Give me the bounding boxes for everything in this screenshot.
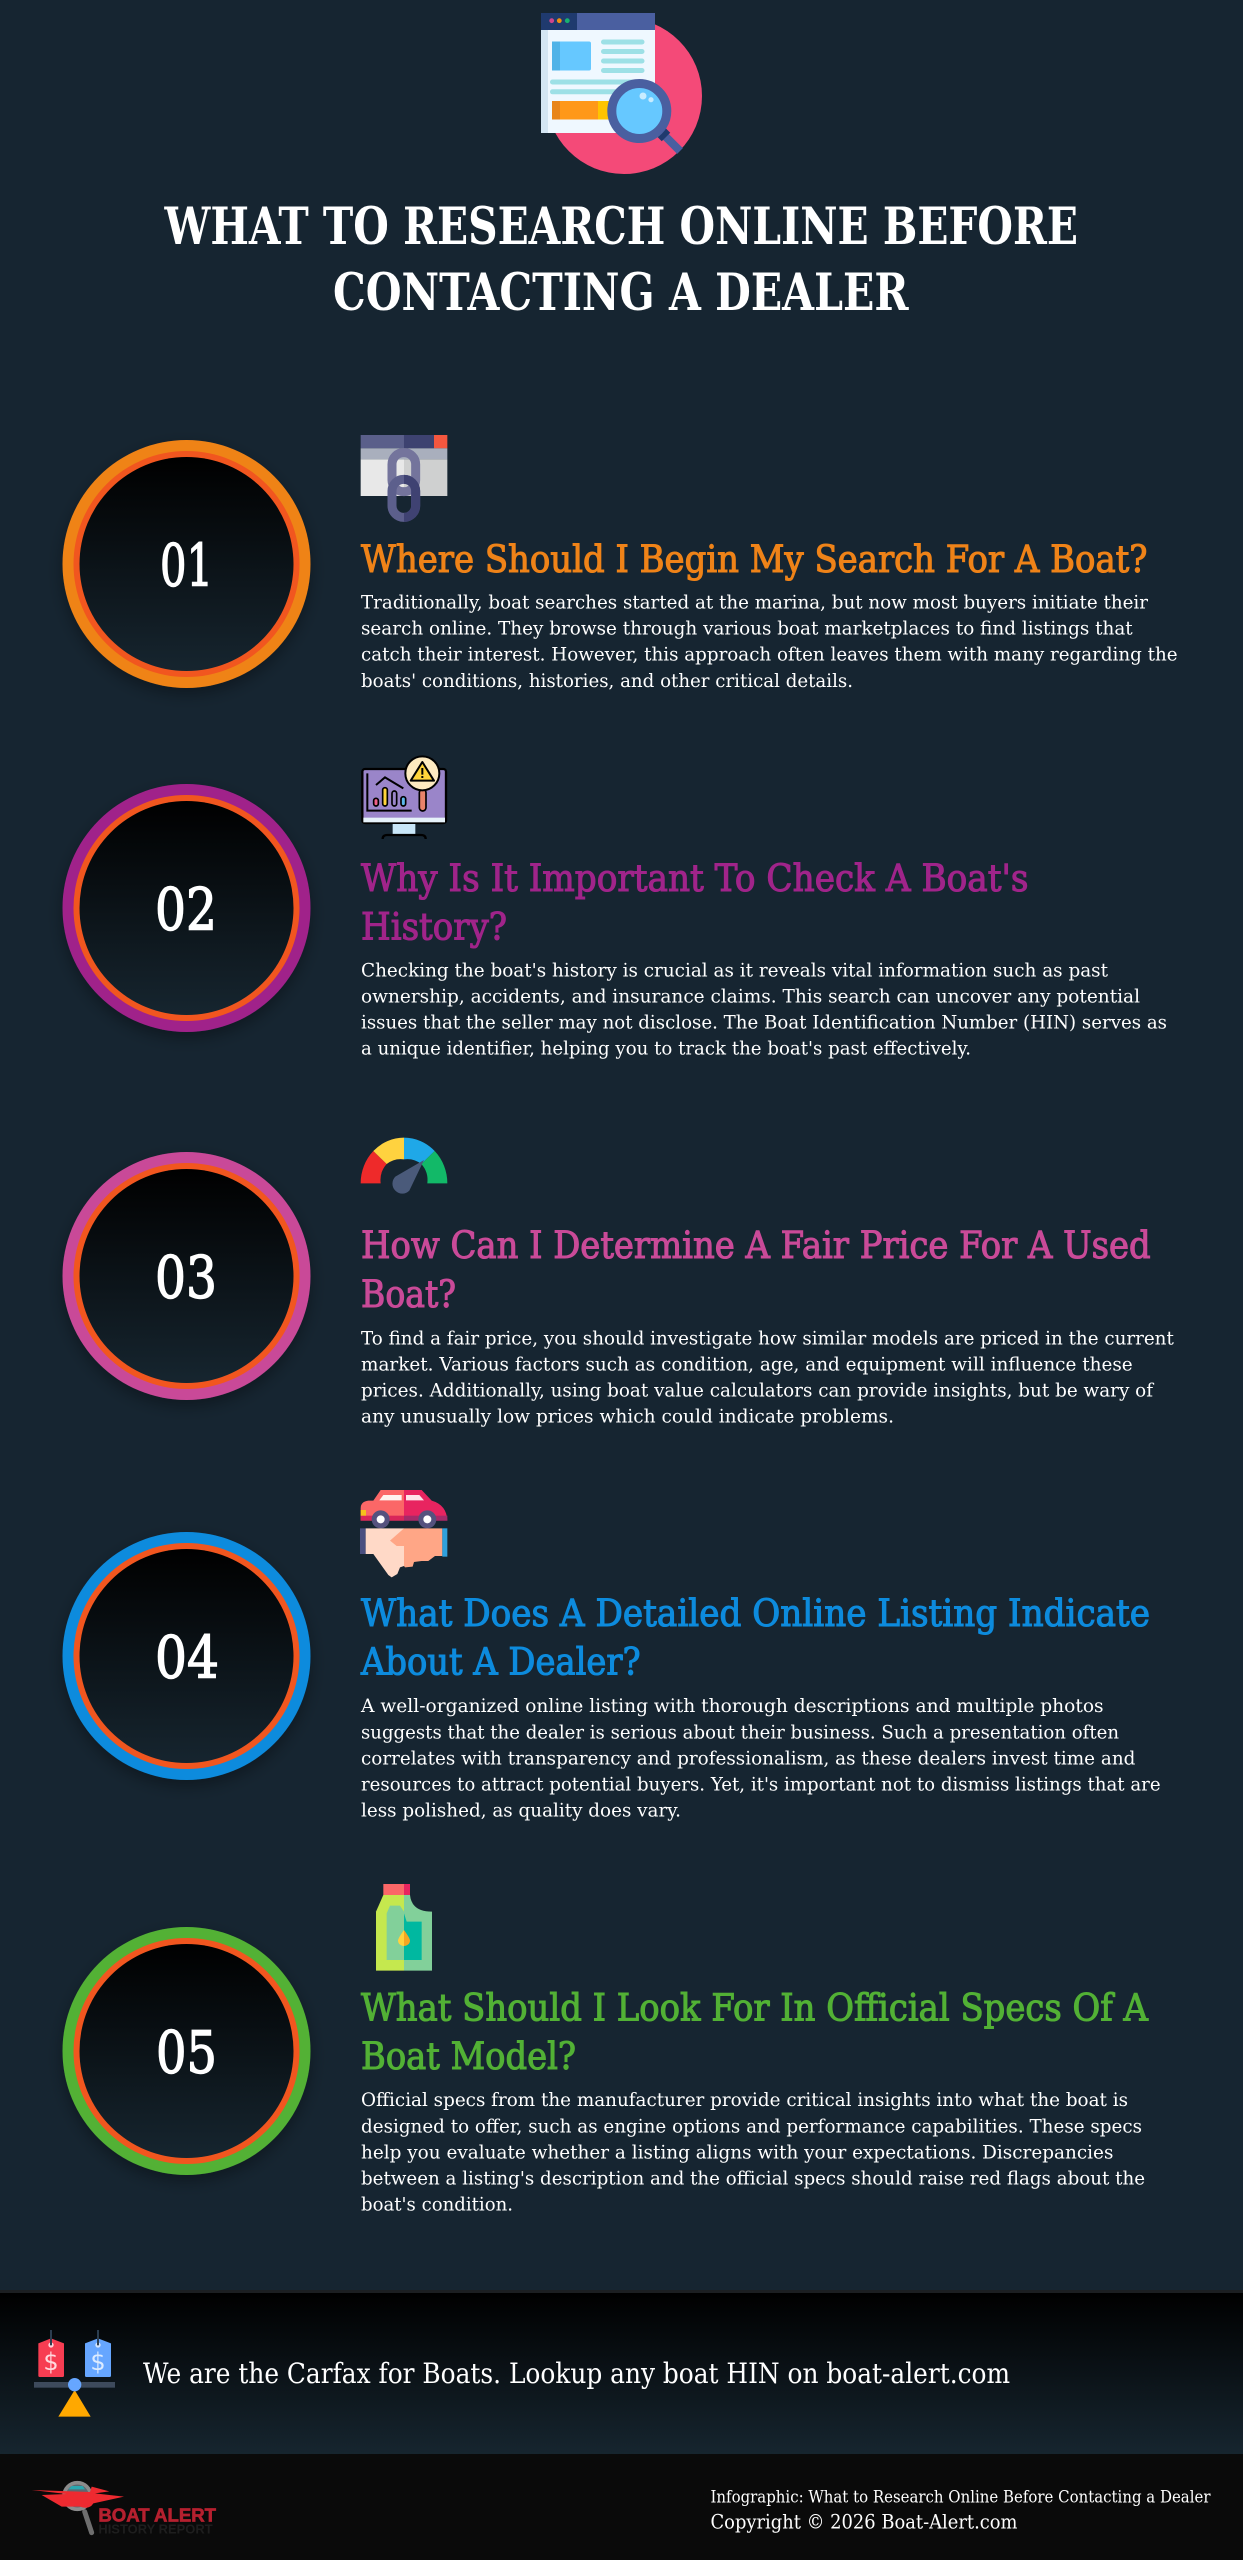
number badge 05: 05 — [156, 2018, 217, 2086]
body text: To find a fair price, you should investigate how similar models are priced in the current — [361, 1327, 1174, 1349]
body text: resources to attract potential buyers. Yet, it's important not to dismiss listings that are — [361, 1774, 1161, 1796]
logo: Boat Alert: BOAT ALERT — [98, 2505, 216, 2526]
body text: catch their interest. However, this approach often leaves them with many regarding the — [361, 644, 1178, 666]
body text: Official specs from the manufacturer provide critical insights into what the boat is — [361, 2089, 1128, 2111]
icon: price tags on balance scale: $ — [90, 2348, 106, 2376]
body text: any unusually low prices which could indicate problems. — [361, 1406, 894, 1428]
number badge 03: 03 — [155, 1244, 217, 1312]
heading — [361, 1987, 1149, 2078]
body text: search online. They browse through various boat marketplaces to find listings that — [361, 618, 1133, 640]
heading: History? — [361, 906, 507, 949]
body text: less polished, as quality does vary. — [361, 1800, 681, 1822]
body text: between a listing's description and the official specs should raise red flags about the — [361, 2167, 1145, 2189]
body text: A well-organized online listing with thorough descriptions and multiple photos — [360, 1695, 1104, 1717]
icon: web link chain — [361, 435, 447, 517]
body text: suggests that the dealer is serious about their business. Such a presentation often — [361, 1721, 1119, 1743]
icon: price gauge — [361, 1138, 447, 1194]
body text — [360, 1695, 1161, 1822]
body text — [361, 959, 1167, 1060]
body text: help you evaluate whether a listing aligns with your expectations. Discrepancies — [361, 2141, 1113, 2163]
panel: step 03 — [62, 1138, 1174, 1428]
panel: step 01 — [62, 435, 1178, 692]
icon: price tags on balance scale — [34, 2330, 115, 2417]
body text: boat's condition. — [361, 2193, 513, 2215]
number badge 03 — [62, 1152, 310, 1400]
heading: What Does A Detailed Online Listing Indicate — [361, 1592, 1150, 1635]
number badge 04 — [62, 1532, 310, 1780]
heading: Boat Model? — [361, 2035, 576, 2078]
number badge 02: 02 — [155, 876, 217, 944]
heading — [361, 1224, 1151, 1316]
heading: About A Dealer? — [360, 1641, 641, 1684]
body text — [361, 2089, 1145, 2215]
icon: monitor chart with warning magnifier — [362, 756, 446, 839]
heading — [360, 1592, 1150, 1684]
heading — [361, 857, 1028, 949]
number badge 02 — [62, 784, 310, 1032]
panel: footer — [0, 2454, 1243, 2560]
logo: Boat Alert: HISTORY REPORT — [98, 2522, 213, 2536]
body text: boats' conditions, histories, and other critical details. — [361, 670, 853, 692]
title: CONTACTING A DEALER — [333, 263, 909, 323]
body text — [361, 592, 1178, 692]
number badge 04: 04 — [155, 1624, 219, 1692]
panel: call to action band — [0, 2290, 1243, 2454]
body text: a unique identifier, helping you to track the boat's past effectively. — [361, 1038, 971, 1060]
body text: Traditionally, boat searches started at the marina, but now most buyers initiate their — [361, 592, 1149, 614]
heading: Where Should I Begin My Search For A Boat? — [361, 538, 1148, 581]
number badge 01 — [62, 440, 310, 688]
icon: car above handshake — [360, 1490, 447, 1577]
body text: Checking the boat's history is crucial as it reveals vital information such as past — [361, 959, 1108, 981]
heading: What Should I Look For In Official Specs Of A — [361, 1987, 1149, 2030]
body text — [361, 1327, 1174, 1428]
body text: ownership, accidents, and insurance claims. This search can uncover any potential — [361, 986, 1140, 1008]
heading: How Can I Determine A Fair Price For A Used — [361, 1224, 1151, 1267]
call to action text: We are the Carfax for Boats. Lookup any boat HIN on boat-alert.com — [143, 2357, 1010, 2390]
body text: correlates with transparency and professionalism, as these dealers invest time and — [361, 1747, 1135, 1769]
number badge 01: 01 — [160, 532, 213, 600]
number badge 05 — [62, 1927, 310, 2175]
icon: oil bottle — [376, 1884, 432, 1971]
panel: step 05 — [62, 1884, 1149, 2215]
heading: Why Is It Important To Check A Boat's — [361, 857, 1028, 900]
panel: step 04 — [62, 1490, 1161, 1822]
heading: Boat? — [361, 1273, 456, 1316]
body text: prices. Additionally, using boat value calculators can provide insights, but be wary of — [361, 1380, 1155, 1402]
title — [164, 197, 1078, 323]
logo: Boat Alert — [32, 2483, 216, 2536]
body text: designed to offer, such as engine options and performance capabilities. These specs — [361, 2115, 1142, 2137]
header icon: browser page with magnifier — [541, 13, 702, 174]
icon: price tags on balance scale: $ — [43, 2348, 59, 2376]
panel: step 02 — [62, 756, 1167, 1060]
body text: market. Various factors such as condition, age, and equipment will influence these — [361, 1354, 1133, 1376]
copyright: Copyright © 2026 Boat-Alert.com — [710, 2510, 1018, 2533]
body text: issues that the seller may not disclose. The Boat Identification Number (HIN) serves as — [361, 1012, 1167, 1034]
